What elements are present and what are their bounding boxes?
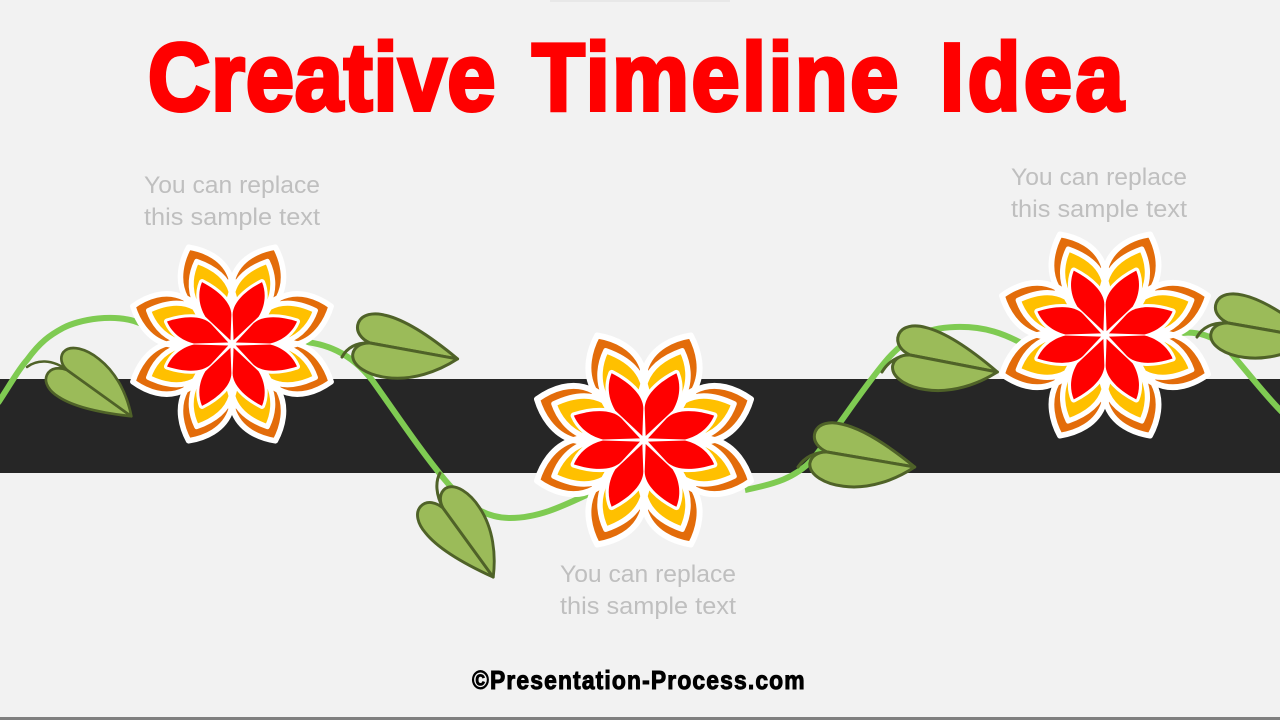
text block: flower 3 caption: this sample text	[1011, 196, 1187, 223]
text block: flower 2 caption	[560, 561, 736, 620]
green vine	[0, 318, 1280, 518]
title: Creative	[148, 24, 495, 131]
leaf pair 1	[27, 340, 147, 438]
flower 3	[993, 223, 1217, 447]
text block: flower 2 caption: You can replace	[560, 561, 736, 588]
title: Timeline	[532, 24, 898, 131]
text block: flower 3 caption: You can replace	[1011, 164, 1187, 191]
text block: flower 2 caption: this sample text	[560, 593, 736, 620]
flower 1	[124, 237, 340, 451]
timeline band	[0, 379, 1280, 473]
leaf pair 5	[882, 322, 1003, 403]
text block: flower 1 caption	[144, 172, 320, 231]
leaf pair 3	[411, 473, 517, 594]
text block: flower 1 caption: this sample text	[144, 204, 320, 231]
text block: flower 1 caption: You can replace	[144, 172, 320, 199]
flower 2	[528, 324, 760, 556]
leaf pair 2	[342, 311, 463, 390]
title	[148, 24, 1125, 131]
leaf pair 4	[798, 420, 920, 498]
leaf pair 6	[1197, 291, 1280, 369]
title: Idea	[940, 24, 1125, 131]
text block: flower 3 caption	[1011, 164, 1187, 223]
footer credit: ©Presentation-Process.com	[472, 667, 805, 695]
